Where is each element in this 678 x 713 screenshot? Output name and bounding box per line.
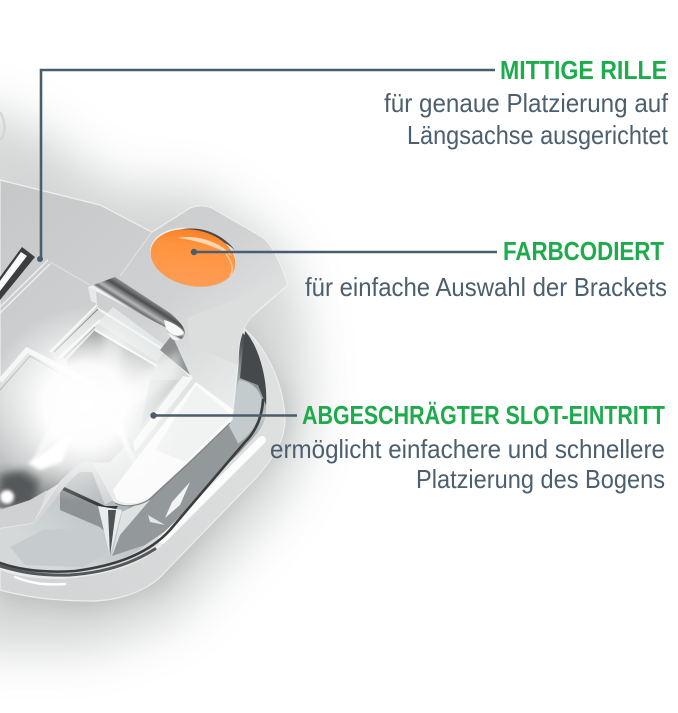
- leader: slot-eintritt: [153, 414, 297, 417]
- chrome rim: [0, 400, 263, 584]
- white slot wall: [113, 382, 234, 503]
- reflective glass in well: [228, 380, 262, 444]
- wing bevel: [237, 316, 252, 365]
- callout: farbcodiert: [305, 236, 667, 302]
- leader: mittige rille: [41, 70, 495, 258]
- grey wall below slot: [112, 424, 240, 556]
- bracket base flange: [0, 322, 285, 601]
- hook detail: [88, 277, 185, 340]
- inner well: [0, 330, 266, 571]
- lower body lip: [33, 461, 113, 523]
- second wing edge: [0, 112, 4, 140]
- leader dots: [37, 249, 197, 419]
- light flare: [0, 307, 183, 503]
- central groove: [0, 247, 50, 313]
- bright spike in well: [98, 506, 122, 556]
- icon: orange color code: [150, 228, 236, 287]
- slot opening: [50, 305, 193, 452]
- white edge line: [50, 232, 152, 285]
- bracket photo: [0, 100, 310, 650]
- leader lines: [41, 70, 497, 416]
- callout: abgeschraegter slot-eintritt: [270, 400, 665, 494]
- dark crescent in well: [240, 331, 266, 405]
- bracket upper body: [0, 180, 288, 528]
- soft shadow around bracket: [0, 100, 310, 650]
- callout: mittige rille: [384, 55, 669, 150]
- left window of slot: [0, 347, 130, 510]
- leader: farbcodiert: [194, 251, 497, 253]
